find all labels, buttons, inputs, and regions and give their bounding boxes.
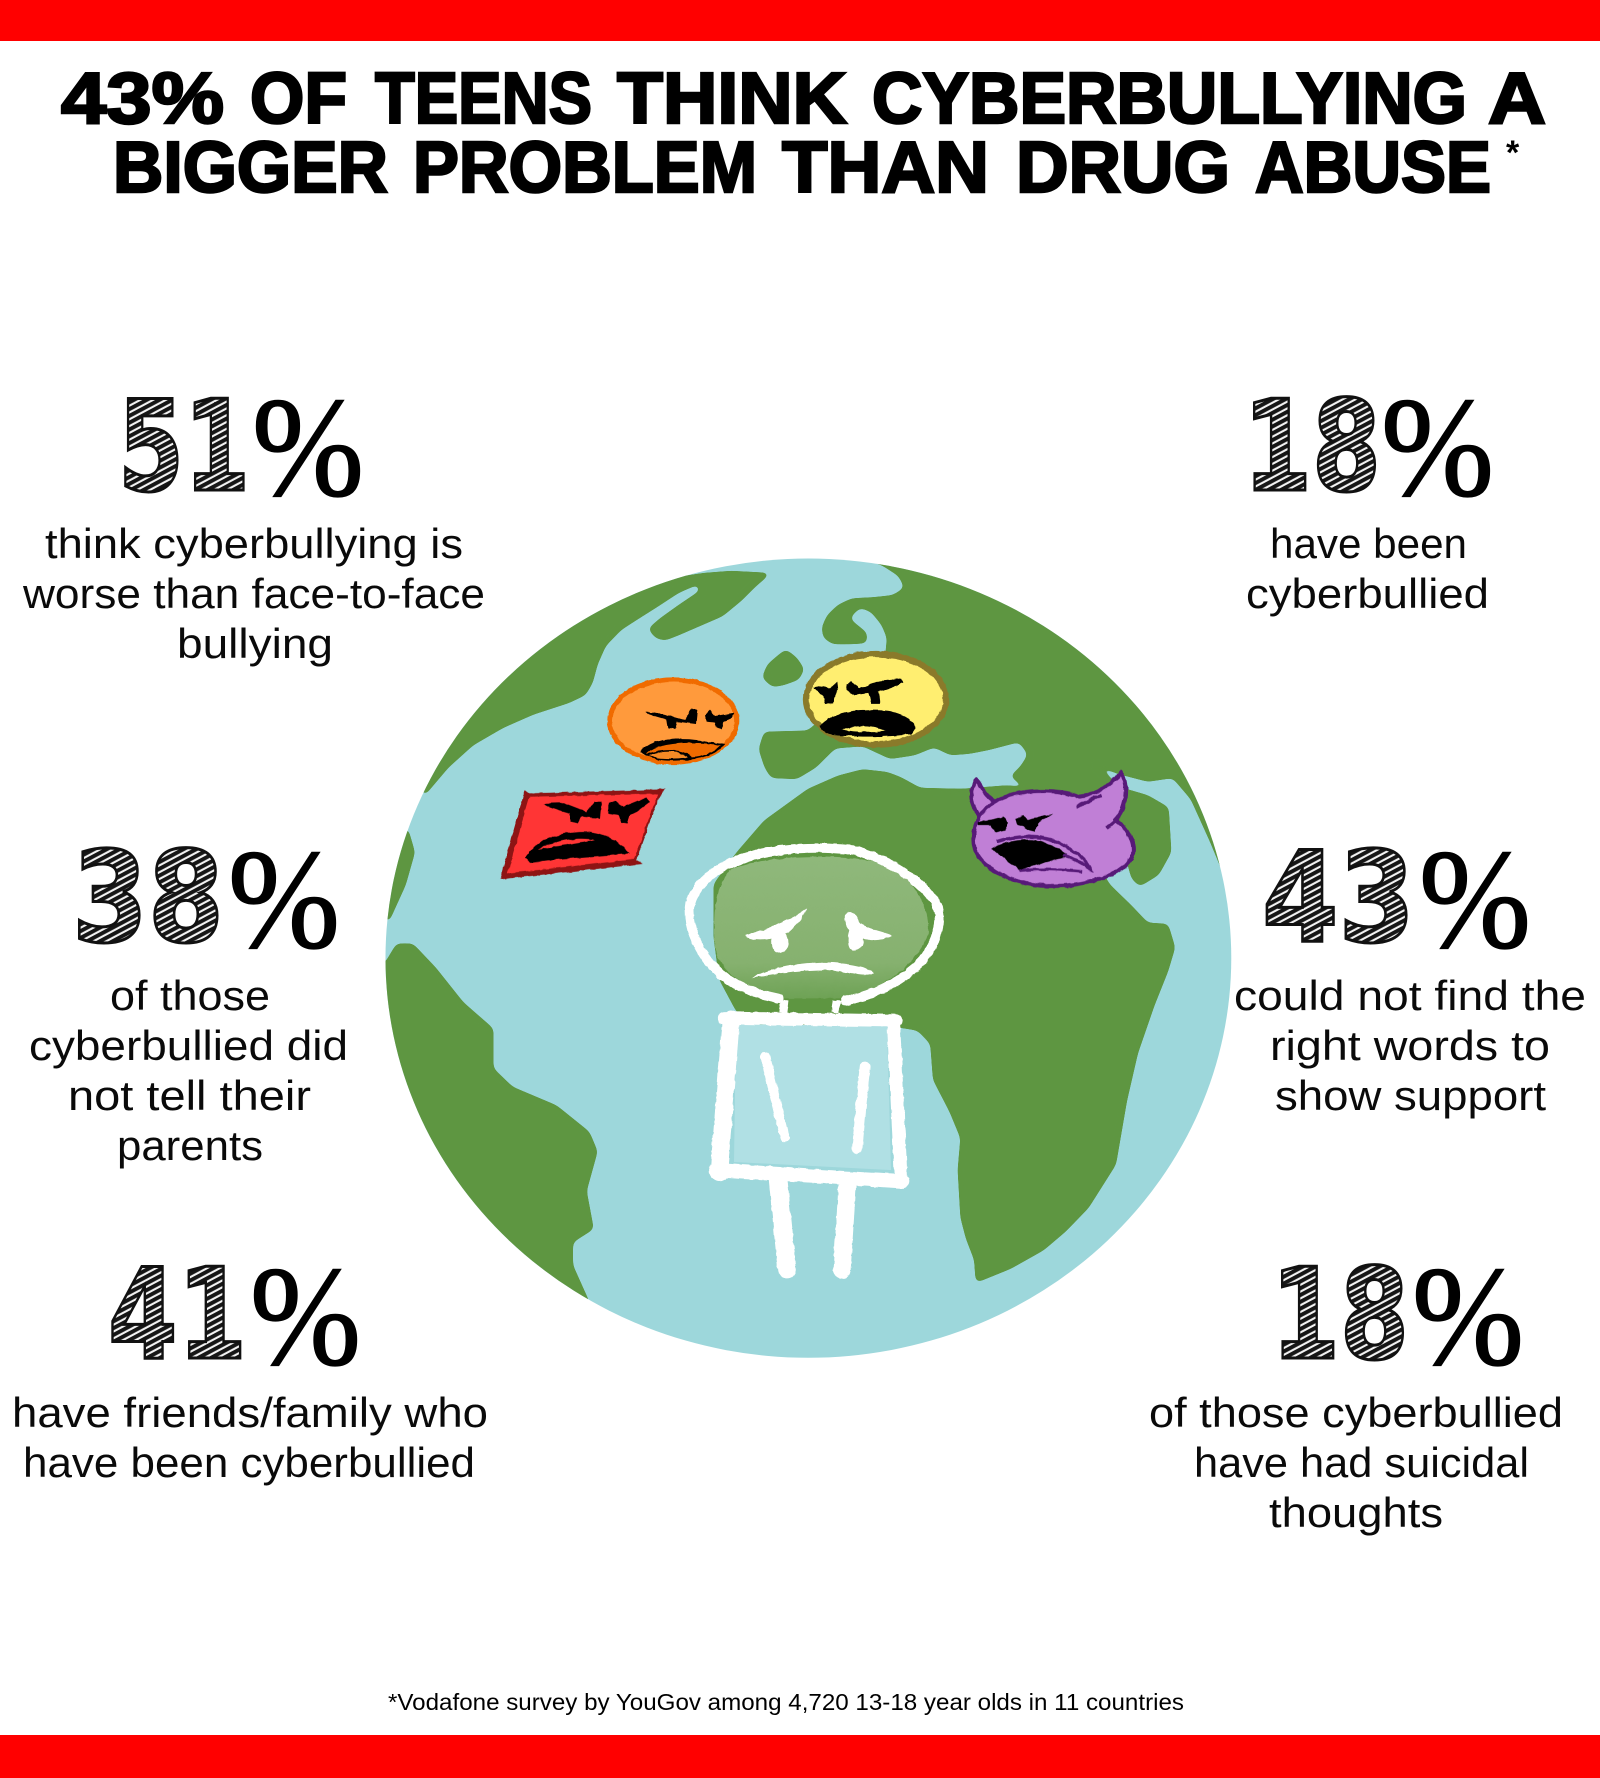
description: cyberbullied did [29, 1022, 348, 1069]
number: 18 [1243, 373, 1381, 520]
stat: 18% have been cyberbullied [1243, 368, 1494, 617]
title: DRUG [1016, 128, 1230, 208]
number: 18 [1271, 1241, 1409, 1388]
head [689, 848, 939, 1013]
description: think cyberbullying is [45, 520, 463, 567]
title: * [1506, 134, 1520, 172]
title: PROBLEM [413, 128, 757, 208]
description: could not find the [1234, 972, 1586, 1019]
description: have had suicidal [1194, 1439, 1529, 1486]
globe map [386, 558, 1232, 1358]
icon: orange angry face [610, 680, 737, 762]
percent sign: % [228, 820, 340, 978]
sad figure [689, 848, 939, 1270]
title: ABUSE [1255, 128, 1491, 208]
title: TEENS [375, 59, 592, 139]
continents [386, 564, 1220, 1300]
description: cyberbullied [1246, 570, 1489, 617]
icon: purple devil [971, 772, 1133, 886]
ocean [385, 559, 1231, 1358]
title: BIGGER [113, 128, 388, 208]
description: show support [1275, 1072, 1546, 1119]
percent sign: % [250, 1237, 361, 1395]
number: 38 [72, 824, 224, 971]
footnote: *Vodafone survey by YouGov among 4,720 13-18 year olds in 11 countries [388, 1689, 1184, 1715]
number: 51 [118, 373, 250, 520]
number: 43 [1262, 824, 1415, 971]
percent sign: % [252, 368, 364, 526]
number: 41 [108, 1241, 247, 1388]
stat: 43% [1234, 820, 1586, 1119]
title [61, 59, 1546, 208]
title: A [1488, 59, 1546, 139]
description: right words to [1270, 1022, 1550, 1069]
stat: 18% suicidal thoughts [1149, 1237, 1563, 1536]
top red bar [0, 0, 1600, 41]
title: CYBERBULLYING [872, 59, 1467, 139]
description: have friends/family who [12, 1389, 488, 1436]
title: THAN [782, 128, 989, 208]
title: OF [250, 59, 347, 139]
body [716, 1018, 902, 1270]
percent sign: % [1412, 1237, 1524, 1395]
icon: red angry rectangle [500, 789, 665, 879]
percent sign: % [1419, 820, 1531, 978]
description: parents [117, 1122, 263, 1169]
left tear [772, 930, 788, 953]
stat: 41% [12, 1237, 488, 1486]
description: of those cyberbullied [1149, 1389, 1563, 1436]
description: have been [1270, 520, 1467, 567]
right brow and tear [845, 912, 892, 951]
title: THINK [617, 59, 847, 139]
left brow [745, 908, 807, 940]
description: of those [110, 972, 270, 1019]
stat: 51% [22, 368, 485, 667]
bottom red bar [0, 1735, 1600, 1778]
globe illustration [386, 558, 1232, 1358]
mouth [752, 962, 873, 978]
head outline [689, 848, 939, 1001]
description: have been cyberbullied [23, 1439, 475, 1486]
description: bullying [177, 620, 333, 667]
percent sign: % [1381, 368, 1494, 526]
angry faces [500, 654, 1133, 886]
description: thoughts [1269, 1489, 1443, 1536]
title: 43% [61, 59, 224, 139]
description: worse than face-to-face [22, 570, 485, 617]
head tint [714, 857, 928, 998]
stat: 38% [29, 820, 348, 1169]
icon: yellow angry face [806, 654, 946, 745]
description: not tell their [68, 1072, 311, 1119]
body tint [734, 1024, 891, 1170]
neck [783, 1000, 837, 1013]
